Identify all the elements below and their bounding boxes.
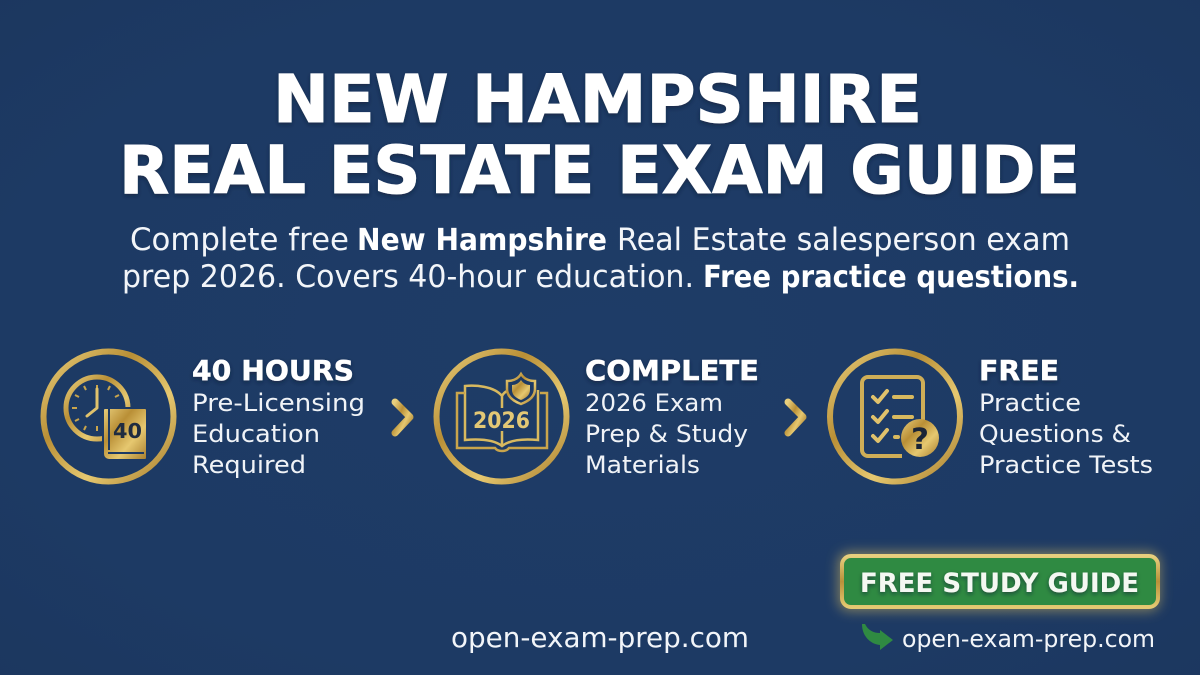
description: Required — [192, 451, 306, 479]
heading: COMPLETE — [585, 354, 759, 387]
description: Pre-Licensing — [192, 389, 365, 417]
title: NEW HAMPSHIRE — [273, 61, 922, 138]
url: center: open-exam-prep.com — [451, 621, 749, 654]
heading: FREE — [979, 354, 1059, 387]
icon: checklist with question badge in gold ring: ? — [911, 422, 929, 456]
description: Questions & — [979, 420, 1131, 448]
subtitle: Free practice questions. — [703, 260, 1079, 295]
icon: clock and book in gold ring — [44, 352, 174, 482]
description: Prep & Study — [585, 420, 748, 448]
button: free study guide: FREE STUDY GUIDE — [860, 568, 1139, 599]
description: Education — [192, 420, 320, 448]
description: Practice Tests — [979, 451, 1153, 479]
subtitle — [122, 222, 1079, 295]
subtitle: Real Estate salesperson exam — [617, 222, 1070, 258]
url: right: open-exam-prep.com — [902, 625, 1155, 653]
feature: 40 hours — [44, 352, 365, 482]
feature: free — [830, 352, 1153, 482]
description — [585, 389, 748, 479]
description — [192, 389, 365, 479]
feature: complete — [436, 352, 759, 482]
description — [979, 389, 1153, 479]
subtitle: Complete free — [130, 222, 349, 258]
description: 2026 Exam — [585, 389, 723, 417]
icon: open book with 2026 and shield in gold ring — [436, 352, 566, 482]
icon: open book with 2026 and shield in gold ring: 2026 — [473, 409, 530, 434]
description: Practice — [979, 389, 1081, 417]
subtitle: prep 2026. Covers 40-hour education. — [122, 259, 694, 295]
icon: green arrow — [862, 624, 893, 650]
title — [119, 61, 1080, 209]
arrow — [395, 402, 410, 433]
heading: 40 HOURS — [192, 354, 354, 387]
icon: checklist with question badge in gold ring — [830, 352, 960, 482]
title: REAL ESTATE EXAM GUIDE — [119, 132, 1080, 209]
icon: clock and book in gold ring: 40 — [113, 419, 142, 443]
subtitle: New Hampshire — [357, 223, 607, 258]
arrow — [788, 402, 803, 433]
button: free study guide — [838, 552, 1160, 611]
description: Materials — [585, 451, 700, 479]
